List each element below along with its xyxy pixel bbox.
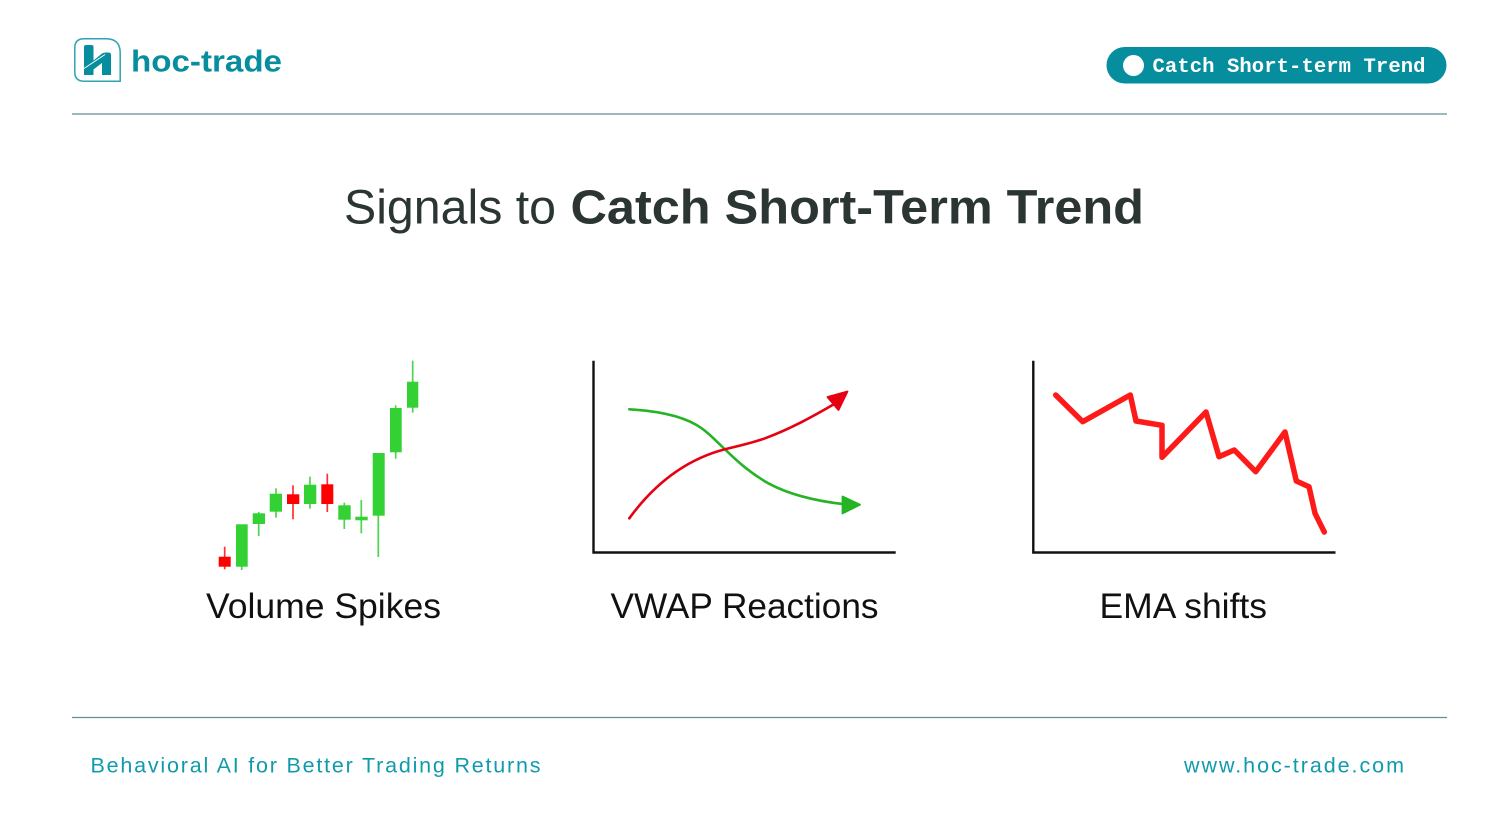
label: Volume Spikes: Volume Spikes (206, 587, 441, 626)
panel: EMA shifts (1033, 361, 1336, 626)
label: EMA shifts: EMA shifts (1100, 587, 1267, 626)
chart: crossing curves (594, 361, 896, 552)
logo wordmark: hoc-trade (131, 44, 282, 78)
footer tagline: Behavioral AI for Better Trading Returns (90, 754, 540, 778)
badge: Catch Short-term Trend: Catch Short-term Trend (1152, 56, 1426, 79)
footer website: www.hoc-trade.com (1183, 754, 1404, 778)
curve: red arrow (629, 392, 848, 518)
chart: falling line (1033, 361, 1336, 552)
badge: Catch Short-term Trend (1106, 47, 1446, 84)
title: Signals to (344, 182, 556, 234)
icon: logo badge (75, 39, 120, 81)
panel: volume spikes (206, 361, 441, 626)
title: Catch Short-Term Trend (570, 182, 1144, 234)
title (344, 182, 1144, 234)
logo: hoc-trade (75, 39, 282, 81)
chart: candlesticks (219, 361, 418, 570)
curve: green arrow (629, 409, 860, 514)
label: VWAP Reactions: VWAP Reactions (610, 587, 878, 626)
panel: VWAP reactions (594, 361, 896, 626)
